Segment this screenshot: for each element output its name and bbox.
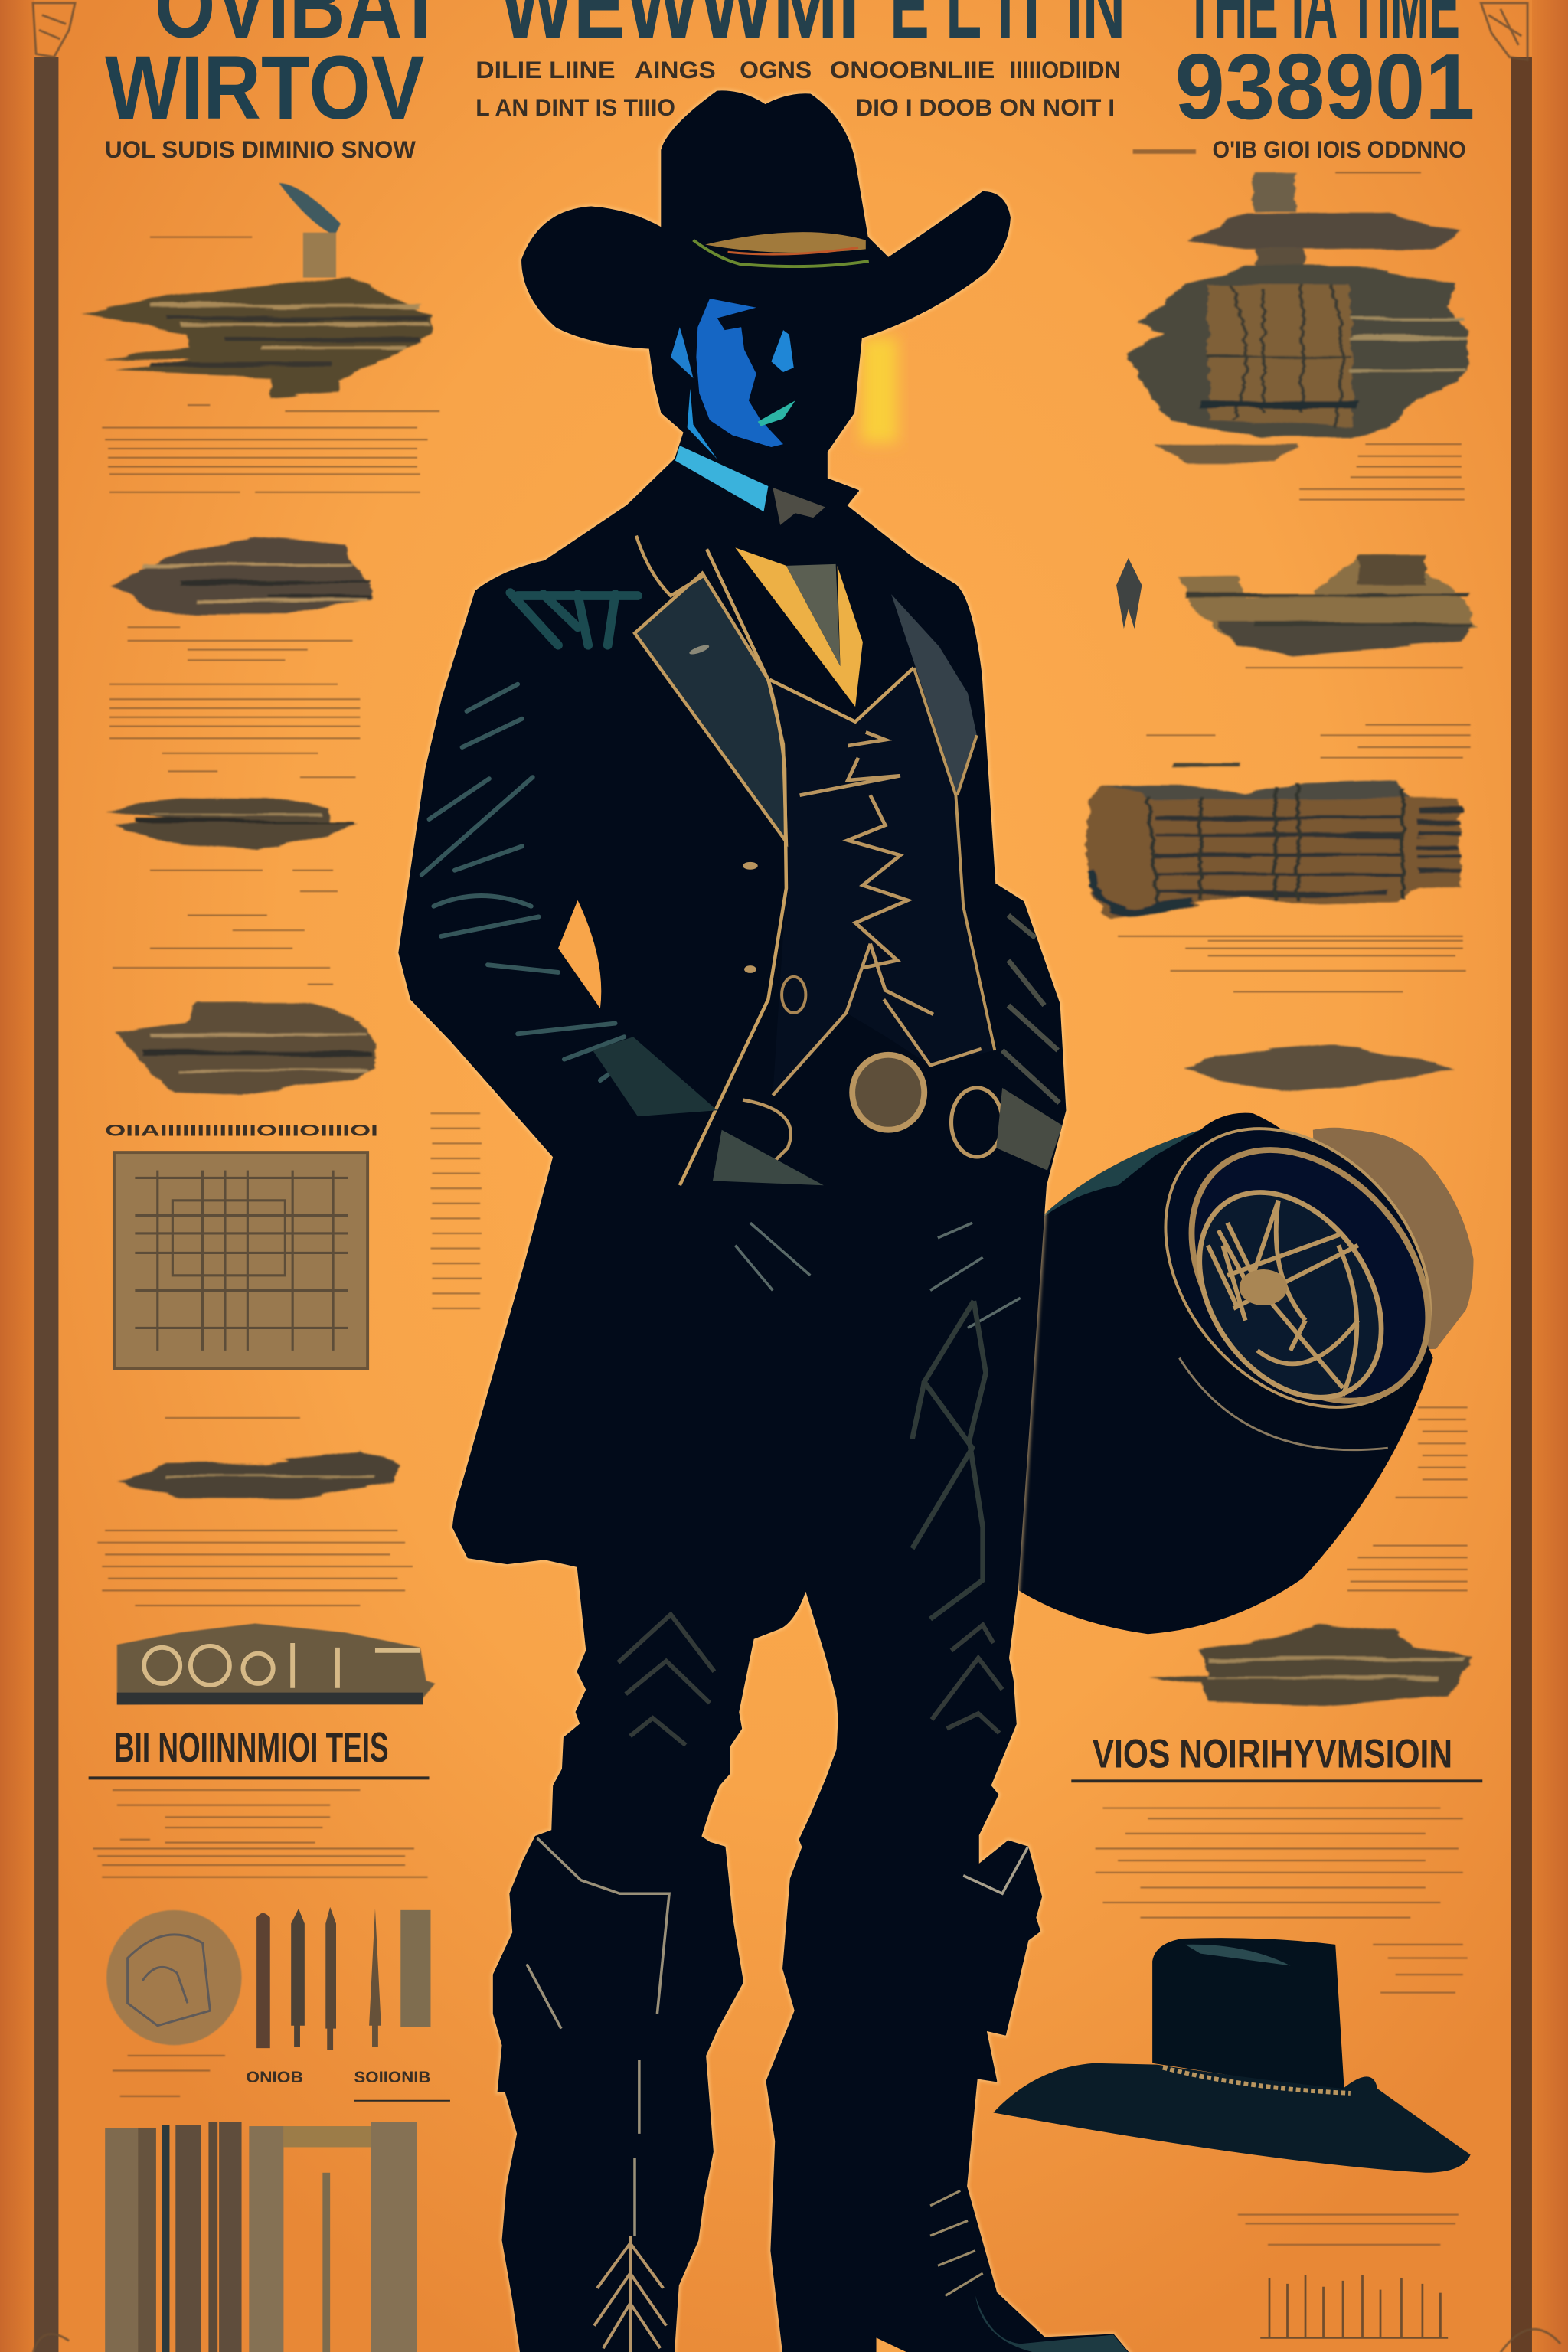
machine left 2 xyxy=(113,537,372,616)
spearhead icon xyxy=(1116,558,1142,629)
section heading bottom right: VIOS NOIRIHYVMSIOIN xyxy=(1093,1732,1452,1777)
right column text lines xyxy=(1096,152,1471,2245)
right machine 4 xyxy=(1182,1044,1455,1093)
coat buttons xyxy=(743,862,805,1013)
sleeve folds xyxy=(422,684,642,1080)
left lapel xyxy=(635,573,786,841)
left border xyxy=(0,0,58,2352)
hand xyxy=(713,1130,824,1185)
shirt collar xyxy=(675,446,768,511)
header text rows: ONOOBNLIIE xyxy=(830,57,995,83)
yellow glow xyxy=(861,338,897,443)
bottom plank diagrams xyxy=(105,2122,417,2352)
small labels: SOIIONIB xyxy=(354,2067,430,2086)
right machine 1 cylinder xyxy=(1127,172,1469,462)
vest xyxy=(769,668,995,1096)
watch ring xyxy=(952,1088,1002,1157)
blueprint panel xyxy=(114,1152,368,1368)
hat band xyxy=(693,232,869,266)
boot toe xyxy=(975,2295,1129,2352)
knee chevrons xyxy=(618,1615,1002,1745)
vest lacing xyxy=(800,732,933,1014)
shirt front xyxy=(735,547,863,707)
small labels xyxy=(246,2067,430,2086)
inner lapel xyxy=(680,549,914,1185)
bow tie xyxy=(773,488,825,525)
small labels: ONIOB xyxy=(246,2067,303,2086)
section heading bottom left: BII NOIINNMIOI TEIS xyxy=(114,1723,389,1771)
lower sleeve shade xyxy=(593,1037,717,1116)
collar line xyxy=(636,536,705,596)
machine left 5 xyxy=(117,1452,400,1498)
boot herringbone xyxy=(594,2236,666,2352)
section heading left upper: OIIAIIIIIIIIIIIIIOIIIOIIIIOI xyxy=(105,1121,378,1140)
header text rows xyxy=(105,57,1466,163)
machine left 3 xyxy=(108,797,357,849)
face xyxy=(671,299,795,459)
right big number: 938901 xyxy=(1175,34,1475,139)
header text rows: IIIIIODIIDN xyxy=(1010,57,1121,83)
disc diagram xyxy=(106,1910,242,2045)
cowboy glow halo xyxy=(399,91,1129,2352)
lapel buttonhole xyxy=(688,643,710,656)
right machine 5 xyxy=(1148,1624,1471,1704)
cowboy figure xyxy=(399,91,1129,2352)
coat edge right xyxy=(914,668,995,1050)
right border xyxy=(1511,0,1568,2352)
spare hat xyxy=(993,1938,1471,2173)
left big word: WIRTOV xyxy=(105,38,425,138)
header text rows: DIO I DOOB ON NOIT I xyxy=(855,94,1115,121)
left column text lines xyxy=(93,237,482,2096)
header text rows: O'IB GIOI IOIS ODDNNO xyxy=(1213,136,1466,163)
heel gap xyxy=(877,2337,908,2352)
right lapel xyxy=(891,594,977,795)
header text rows: UOL SUDIS DIMINIO SNOW xyxy=(105,136,416,163)
teal shoulder folds xyxy=(510,593,638,645)
bullet samples xyxy=(256,1907,430,2050)
right hand xyxy=(996,1088,1063,1171)
header text rows: AINGS xyxy=(635,57,716,83)
machine left 1 fin and tower xyxy=(279,183,341,278)
section rule lines xyxy=(89,1778,1482,2101)
machine left 4 xyxy=(116,1002,375,1096)
machine left 1 hull xyxy=(81,278,430,397)
right machine 3 cylinder xyxy=(1086,765,1462,918)
fingers and folds xyxy=(735,1223,1021,1328)
necktie pattern xyxy=(786,564,840,666)
belt buckle xyxy=(849,1052,927,1133)
right sleeve folds xyxy=(1002,915,1060,1102)
barrel cylinder xyxy=(1313,1128,1474,1351)
trouser pattern xyxy=(913,1301,986,1619)
machine left 6 xyxy=(117,1624,435,1704)
lower vest curves xyxy=(743,944,982,1171)
boot strap xyxy=(963,1847,1027,1893)
bottom right tick marks xyxy=(1260,2275,1448,2337)
title line xyxy=(155,0,1460,57)
barrel body xyxy=(1005,1076,1485,1634)
header text rows: OGNS xyxy=(740,57,812,83)
header text rows: DILIE LIINE xyxy=(475,57,616,83)
boot details xyxy=(527,1838,669,2236)
right machine 2 xyxy=(1178,555,1478,655)
arm gap xyxy=(558,900,601,1008)
boot laces xyxy=(930,2190,983,2295)
figure silhouette xyxy=(399,91,1129,2352)
header text rows: L AN DINT IS TIIIO xyxy=(475,94,675,121)
